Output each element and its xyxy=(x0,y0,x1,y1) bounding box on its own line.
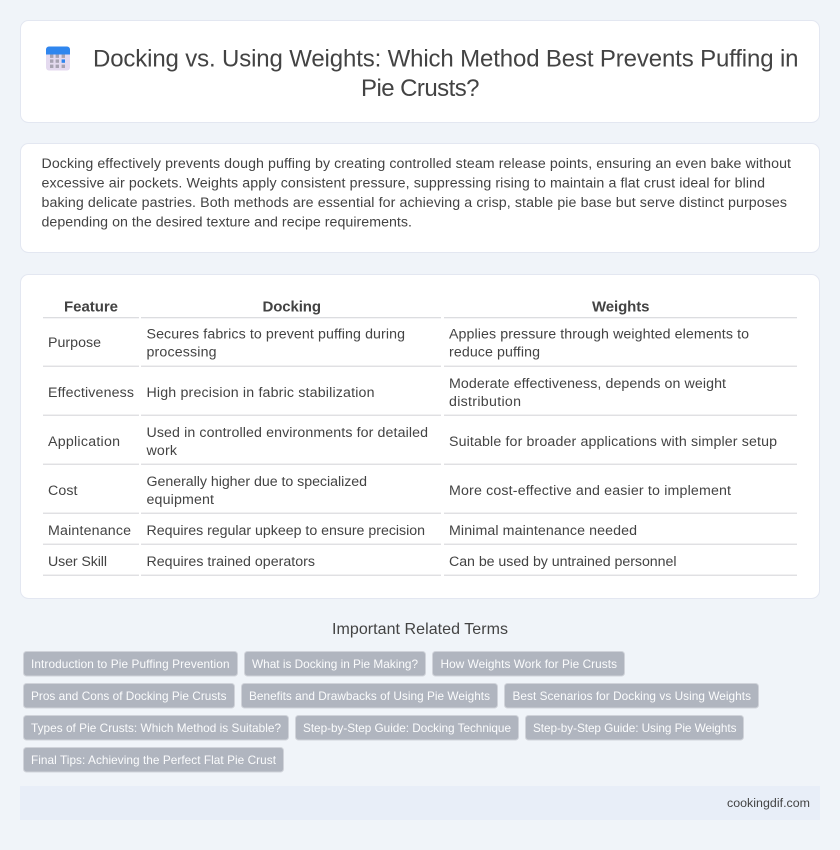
table row: maintenance: Requires regular upkeep to ensure precision xyxy=(146,523,425,539)
table row: maintenance xyxy=(48,523,637,539)
table row: application: Application xyxy=(48,434,120,450)
tag: how weights work: How Weights Work for Pie Crusts xyxy=(440,657,617,671)
text block: introduction paragraph: Docking effectively prevents dough puffing by creating controlled steam release points, ensuring an even bake without xyxy=(42,156,791,172)
panel: introduction xyxy=(20,144,820,252)
table row: user skill: Requires trained operators xyxy=(146,554,315,570)
tag: final tips: Final Tips: Achieving the Perfect Flat Pie Crust xyxy=(31,753,277,767)
table row: cost: More cost-effective and easier to implement xyxy=(449,483,731,499)
table row: user skill xyxy=(48,554,676,570)
tag: introduction: Introduction to Pie Puffing Prevention xyxy=(31,657,230,671)
tag: how weights work xyxy=(432,652,624,676)
table row: effectiveness: distribution xyxy=(449,394,521,410)
tag: using pie weights xyxy=(526,716,744,740)
footer xyxy=(20,786,820,820)
table row: effectiveness xyxy=(48,376,726,410)
table header row: Weights xyxy=(592,299,650,316)
table row: application xyxy=(48,425,777,459)
tag: types of pie crusts: Types of Pie Crusts: Which Method is Suitable? xyxy=(31,721,281,735)
table row: maintenance: Maintenance xyxy=(48,523,131,539)
title xyxy=(93,46,798,102)
tag: best scenarios xyxy=(504,684,758,708)
table header row: Feature xyxy=(64,299,118,316)
table row: purpose: reduce puffing xyxy=(449,344,540,360)
table row: effectiveness: Effectiveness xyxy=(48,385,134,401)
text block: introduction paragraph xyxy=(42,156,791,230)
tag: what is docking xyxy=(244,652,426,676)
tag: introduction xyxy=(24,652,238,676)
table row: effectiveness: Moderate effectiveness, depends on weight xyxy=(449,376,726,392)
table row: application: Suitable for broader applications with simpler setup xyxy=(449,434,777,450)
title: Pie Crusts? xyxy=(361,75,480,102)
tag: docking technique xyxy=(296,716,518,740)
title: Docking vs. Using Weights: Which Method Best Prevents Puffing in xyxy=(93,46,798,72)
panel: title card xyxy=(20,20,820,122)
table row: purpose: Applies pressure through weighted elements to xyxy=(449,326,749,342)
table header row xyxy=(64,299,650,316)
table row: maintenance: Minimal maintenance needed xyxy=(449,523,637,539)
table row: purpose: Secures fabrics to prevent puffing during xyxy=(146,326,405,342)
table row: effectiveness: High precision in fabric stabilization xyxy=(146,385,374,401)
tag: benefits and drawbacks: Benefits and Drawbacks of Using Pie Weights xyxy=(249,689,490,703)
table header row: Docking xyxy=(262,299,321,316)
table row: purpose xyxy=(48,326,749,360)
table row: cost: equipment xyxy=(146,492,214,508)
tag: pros and cons: Pros and Cons of Docking Pie Crusts xyxy=(31,689,227,703)
icon: calendar xyxy=(46,46,70,70)
tag: what is docking: What is Docking in Pie Making? xyxy=(252,657,418,671)
heading: important related terms: Important Related Terms xyxy=(332,621,508,638)
tag: final tips xyxy=(24,748,284,772)
table row: purpose: Purpose xyxy=(48,335,101,351)
table row: cost: Cost xyxy=(48,483,78,499)
table row: user skill: User Skill xyxy=(48,554,107,570)
table row: cost: Generally higher due to specialized xyxy=(146,474,367,490)
tag: docking technique: Step-by-Step Guide: Docking Technique xyxy=(303,721,511,735)
text block: introduction paragraph: depending on the desired texture and recipe requirements. xyxy=(42,214,412,230)
tag: using pie weights: Step-by-Step Guide: Using Pie Weights xyxy=(533,721,737,735)
tag: types of pie crusts xyxy=(24,716,288,740)
table row: purpose: processing xyxy=(146,344,216,360)
text block: introduction paragraph: baking delicate pastries. Both methods are essential for achieving a crisp, stable pie base but serve distinct purposes xyxy=(42,195,787,211)
table row: application: work xyxy=(146,443,178,459)
footer: cookingdif.com xyxy=(727,796,810,810)
table row: cost xyxy=(48,474,731,508)
text block: introduction paragraph: excessive air pockets. Weights apply consistent pressure, suppressing rising to maintain a flat crust ideal for blind xyxy=(42,176,765,192)
panel: related term tags xyxy=(24,652,758,772)
panel: comparison table xyxy=(20,274,820,598)
tag: pros and cons xyxy=(24,684,234,708)
tag: best scenarios: Best Scenarios for Docking vs Using Weights xyxy=(512,689,751,703)
table row: application: Used in controlled environments for detailed xyxy=(146,425,428,441)
table row: user skill: Can be used by untrained personnel xyxy=(449,554,676,570)
tag: benefits and drawbacks xyxy=(242,684,498,708)
